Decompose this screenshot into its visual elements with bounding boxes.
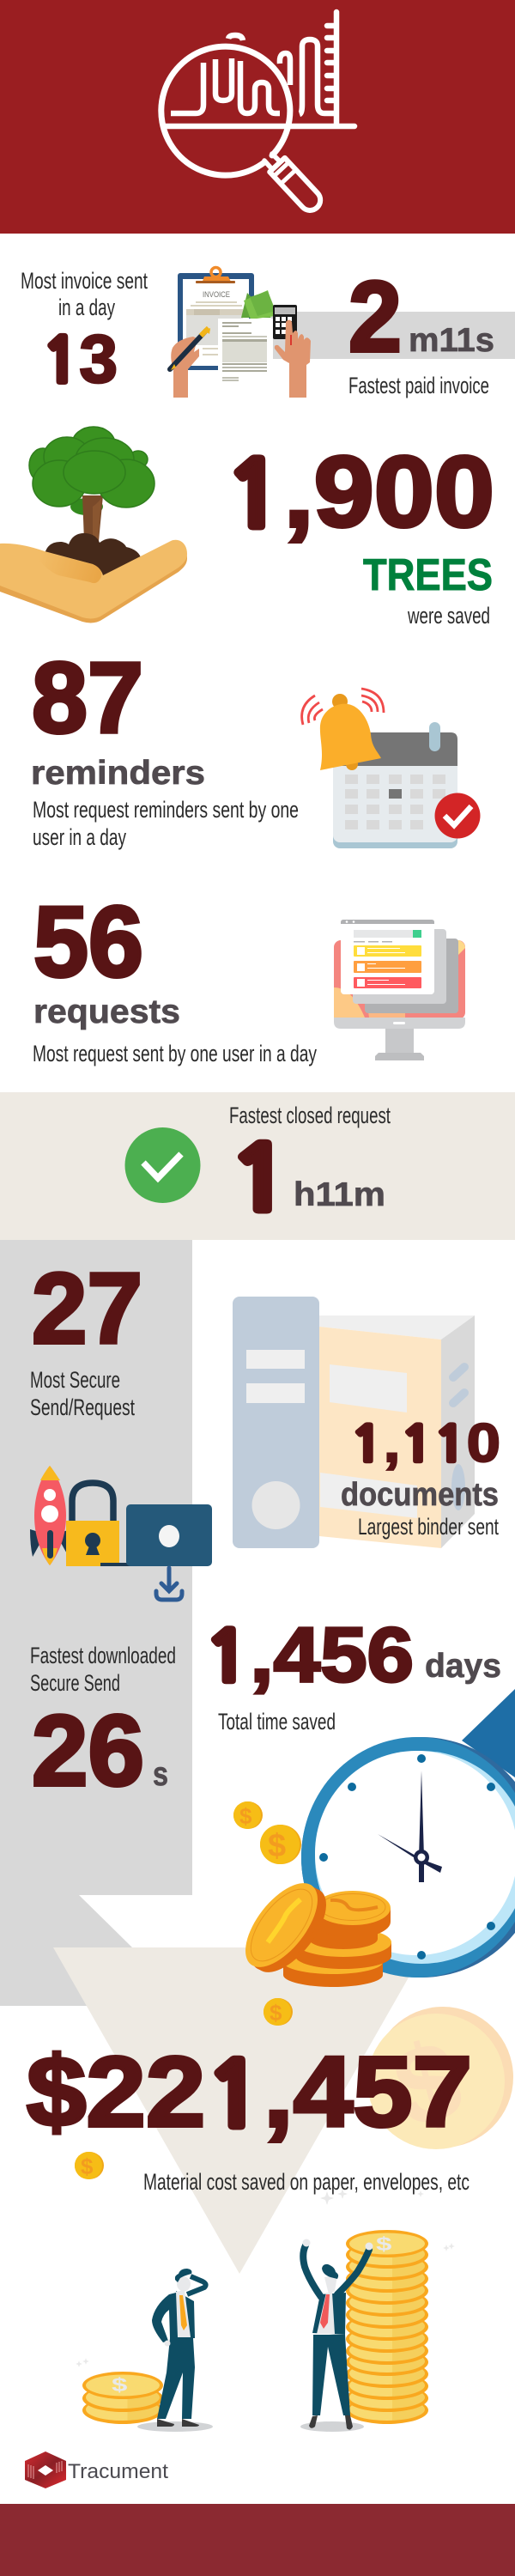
stat: 1h11m: [228, 1103, 391, 1224]
icon: tree in hand: [0, 427, 187, 623]
header band: [0, 0, 515, 234]
stat: 27 secure send/request: 27: [32, 1252, 142, 1364]
beige funnel triangle: [53, 1947, 426, 2274]
stat: 1,900 trees saved: [225, 435, 494, 629]
grey band behind fastest paid invoice: [271, 312, 515, 359]
stat: 1,456 days: Total time saved: [218, 1709, 336, 1735]
icon: worried businessman: [137, 2269, 213, 2432]
icon: green check circle: [125, 1127, 201, 1203]
stat: 1,456 days: [204, 1613, 501, 1735]
stat: 1h11m: 1: [228, 1136, 292, 1224]
icon: small coin stack: [82, 2372, 163, 2424]
icon: gold coin stack: [232, 1871, 391, 1987]
stat: most invoice sent label: in a day: [58, 295, 115, 320]
stat: 1,900 trees saved: 1,900: [225, 435, 494, 548]
stat: 13: 13: [42, 320, 118, 397]
stat: 56 requests: requests: [33, 993, 180, 1030]
panel: grey left column: [0, 1240, 192, 2006]
icon: falling coin large: $: [268, 1828, 286, 1864]
icon: clock: [301, 1689, 515, 1978]
icon: falling coin lower: $: [270, 2000, 282, 2026]
icon: pale background coin: [367, 2007, 513, 2153]
sparkles: [76, 2189, 455, 2367]
stat: 87 reminders: Most request reminders sent by one: [33, 797, 299, 823]
stat: 1h11m: h11m: [294, 1176, 385, 1213]
icon: falling coin small upper: [233, 1801, 263, 1829]
icon: calendar with bell: [302, 689, 481, 848]
stat: most invoice sent label: [21, 268, 148, 320]
icon: small coin stack: $: [112, 2374, 128, 2396]
stat: 27 secure send/request: [30, 1252, 142, 1420]
stat: 2m11s fastest paid invoice: m11s: [409, 322, 494, 359]
stat: 26s fastest download: s: [153, 1756, 168, 1793]
footer band: [0, 2504, 515, 2576]
stat: $221,457 material cost saved: $221,457: [27, 2036, 472, 2148]
stat: 87 reminders: 87: [32, 641, 143, 754]
icon: falling coin left: $: [81, 2154, 94, 2179]
panel: fastest closed request: [0, 1092, 515, 1240]
stat: 1,110 documents: 1,110: [350, 1413, 500, 1473]
stat: 87 reminders: [31, 641, 299, 850]
stat: 1,110 documents: [341, 1413, 500, 1540]
stat: 1,456 days: 1,456: [204, 1613, 414, 1698]
stat: 1h11m: Fastest closed request: [229, 1103, 391, 1128]
icon: pale background coin: $: [381, 2015, 474, 2153]
logo: Tracument: Tracument: [68, 2460, 168, 2483]
stat: most invoice sent label: Most invoice sent: [21, 268, 148, 294]
stat: 56 requests: Most request sent by one user in a day: [33, 1041, 317, 1066]
stat: 56 requests: [33, 885, 317, 1066]
icon: falling coin small upper: $: [239, 1803, 252, 1829]
stat: 2m11s fastest paid invoice: [348, 260, 494, 398]
stat: 26s fastest download: [30, 1643, 176, 1807]
icon: invoice clipboard with hands: INVOICE: [203, 290, 230, 299]
stat: 87 reminders: reminders: [31, 755, 205, 792]
stat: 1,110 documents: documents: [341, 1477, 499, 1513]
stat: 1,456 days: days: [425, 1648, 501, 1685]
icon: large coin stack: [346, 2230, 428, 2424]
stat: 87 reminders: user in a day: [33, 824, 126, 850]
icon: falling coin lower: [264, 1998, 293, 2026]
icon: large coin stack: $: [376, 2233, 392, 2255]
icon: falling coin left: [75, 2152, 104, 2179]
icon: binder: [233, 1297, 475, 1548]
stat: 27 secure send/request: Send/Request: [30, 1394, 135, 1420]
icon: falling coin large: [260, 1825, 301, 1864]
stat: 2m11s fastest paid invoice: 2: [348, 260, 402, 373]
logo: Tracument: [25, 2451, 168, 2488]
icon: rocket, lock and laptop: [30, 1466, 212, 1600]
stat: 27 secure send/request: Most Secure: [30, 1367, 120, 1393]
stat: 26s fastest download: 26: [32, 1694, 144, 1807]
stat: 1,900 trees saved: TREES: [363, 550, 493, 600]
icon: invoice clipboard with hands: [170, 268, 311, 398]
stat: 26s fastest download: Fastest downloaded: [30, 1643, 176, 1668]
stat: 56 requests: 56: [33, 885, 143, 998]
stat: $221,457 material cost saved: [27, 2036, 472, 2195]
icon: monitor with request windows: [334, 920, 465, 1060]
icon: magnifier over chart: [161, 12, 354, 215]
stat: 26s fastest download: Secure Send: [30, 1670, 120, 1696]
icon: celebrating businessman: [300, 2239, 373, 2432]
